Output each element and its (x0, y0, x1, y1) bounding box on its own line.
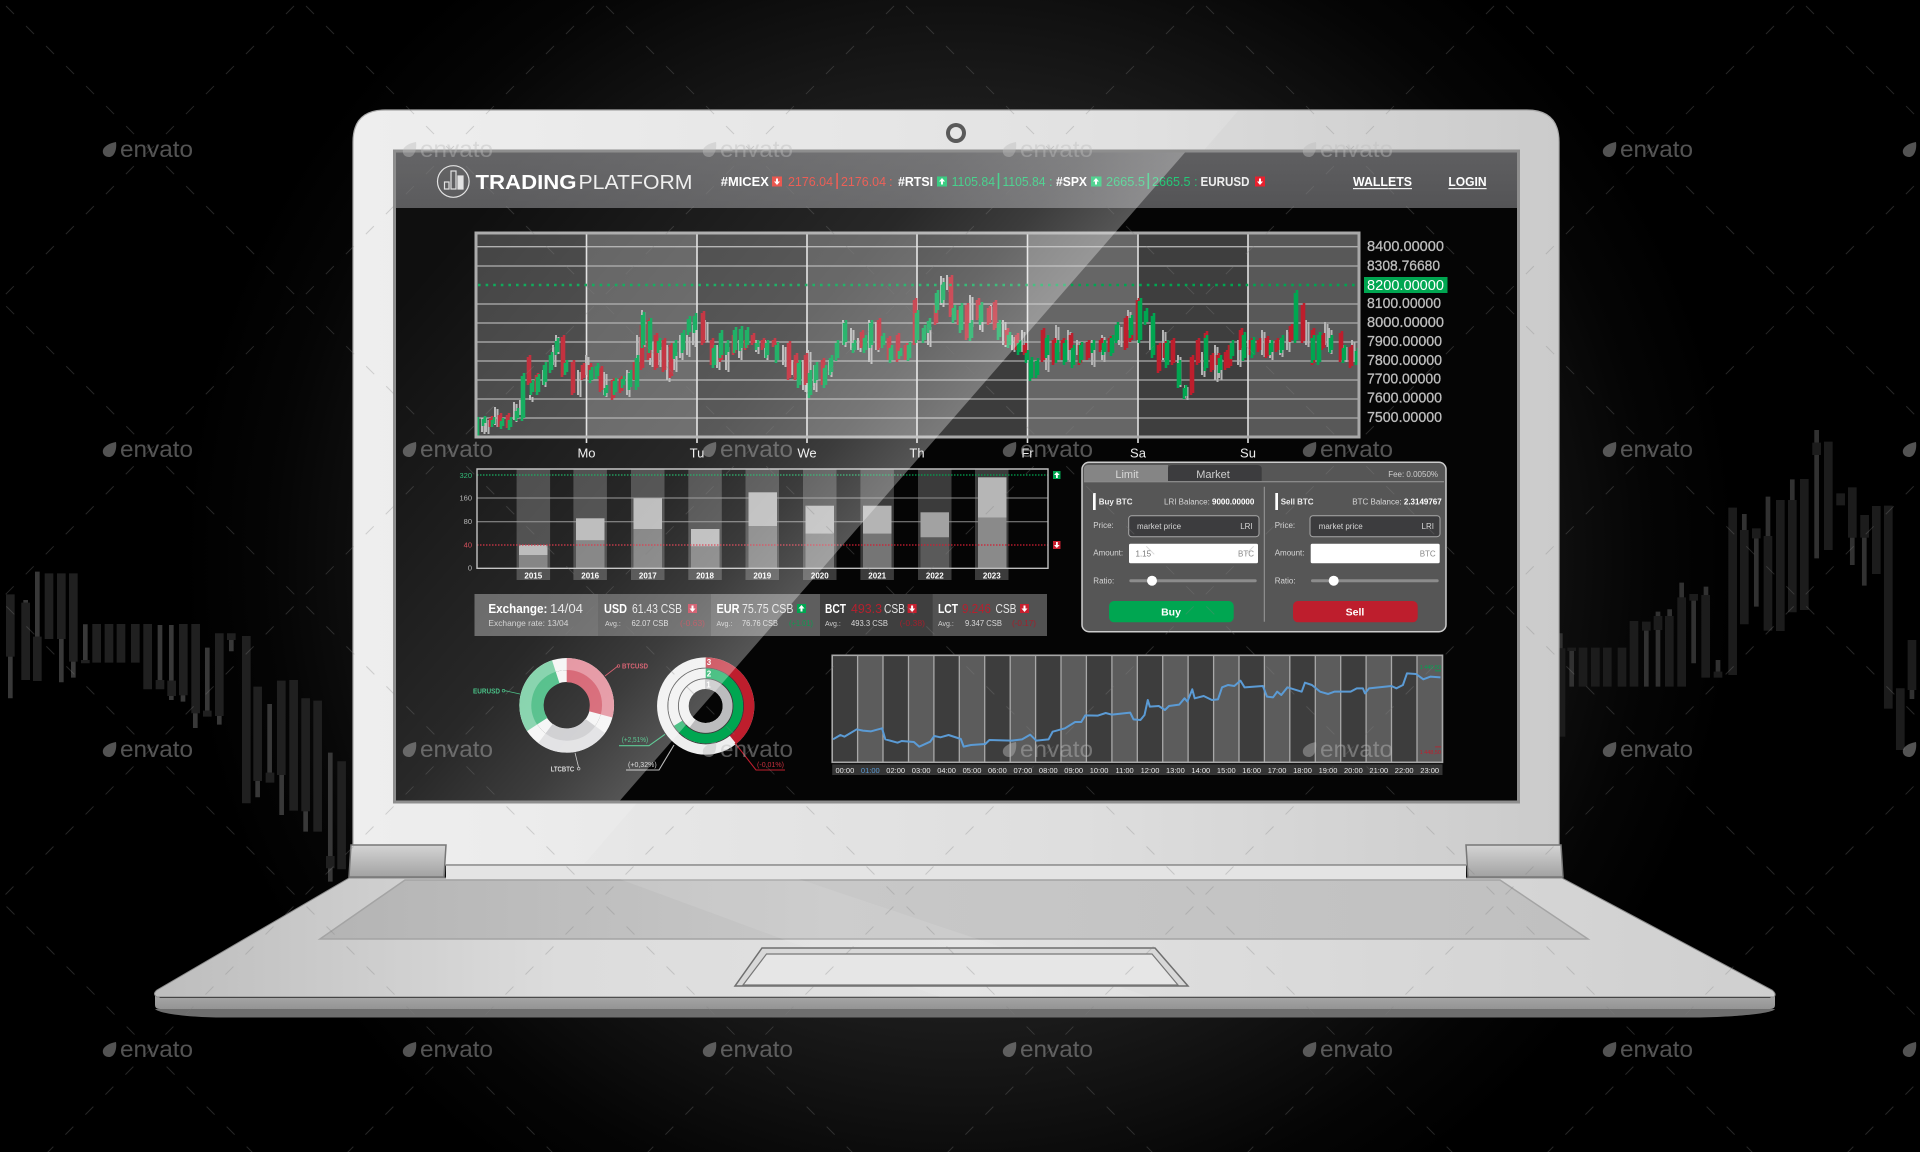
BCT: BCT (825, 601, 846, 616)
time axis: 04:00 (937, 766, 956, 775)
time axis: 19:00 (1319, 766, 1337, 775)
envato watermarks: envato (1020, 1036, 1093, 1062)
panel body (1082, 462, 1446, 632)
bar axis labels: 320 (459, 471, 472, 480)
buy form: Buy BTC (1099, 498, 1133, 506)
envato watermarks: envato (720, 436, 793, 462)
BCT: 493.3 (851, 601, 882, 616)
envato watermarks (103, 136, 1920, 1062)
year labels: 2018 (696, 572, 714, 580)
buy form: LRI (1240, 522, 1253, 531)
tab: market (1168, 465, 1262, 481)
day labels: Su (1240, 446, 1256, 460)
price axis: 7500.00000 (1367, 410, 1442, 426)
buy form: LRI Balance: 9000.00000 (1164, 498, 1255, 506)
trade panel (1082, 462, 1446, 632)
laptop lid (353, 110, 1559, 879)
ticker: #RTSI (898, 174, 933, 189)
LCT: Avg.: (938, 621, 954, 628)
hinge left (349, 845, 446, 877)
time axis: 07:00 (1014, 766, 1032, 775)
buy form: market price (1137, 522, 1182, 531)
ticker: #MICEX (721, 174, 769, 189)
keyboard well (320, 880, 1588, 939)
envato watermarks: envato (120, 736, 193, 762)
ticker: 2176.04 (788, 174, 833, 189)
envato watermarks: envato (1620, 1036, 1693, 1062)
envato watermarks: envato (1320, 436, 1393, 462)
webcam (946, 123, 966, 143)
envato watermarks: envato (1620, 436, 1693, 462)
year labels: 2015 (524, 572, 543, 580)
red candles (490, 275, 1352, 428)
buy form: 1.15 (1136, 550, 1152, 558)
exchange strip (474, 594, 1047, 636)
exchange date: Exchange: (488, 601, 547, 616)
LCT: 9.246 (962, 601, 991, 616)
envato watermarks: envato (420, 436, 493, 462)
year labels (524, 572, 1001, 580)
ring numbers: 2 (707, 670, 712, 678)
lower bars (519, 518, 1006, 568)
exchange date: 14/04 (550, 601, 583, 616)
time axis: 03:00 (912, 766, 931, 775)
low value: 1 448,50 (1420, 750, 1441, 756)
fee: Fee: 0.0050% (1388, 470, 1438, 479)
time axis: 12:00 (1141, 766, 1159, 775)
ring 3 (662, 663, 749, 749)
cell backgrounds (474, 594, 1047, 636)
year labels: 2017 (639, 572, 657, 580)
price axis: 7600.00000 (1367, 390, 1442, 406)
bar axis labels: 40 (464, 540, 472, 550)
callout +2,51: (+2,51%) (622, 735, 649, 744)
ticker: 2665.5 (1152, 174, 1190, 189)
sell form: Price: (1275, 521, 1295, 530)
sell form: BTC (1420, 550, 1436, 558)
chart frame (476, 233, 1359, 437)
envato watermarks: envato (720, 1036, 793, 1062)
main candlestick chart (476, 233, 1448, 460)
EUR (716, 601, 813, 628)
callout -0,01: (-0,01%) (757, 760, 784, 769)
price axis: 8100.00000 (1367, 296, 1441, 312)
ticker: 1105.84 (952, 174, 995, 189)
label BTCUSD: BTCUSD (622, 662, 648, 670)
threshold lines (477, 474, 1050, 476)
bar chart (459, 469, 1060, 580)
price axis: 8400.00000 (1367, 239, 1444, 255)
ticker: 2665.5 (1106, 174, 1145, 189)
buy form: Price: (1093, 521, 1114, 530)
price axis: 8308.76680 (1367, 258, 1440, 274)
tab: limit (1084, 465, 1168, 481)
LCT (938, 601, 1036, 628)
time axis: 17:00 (1268, 766, 1286, 775)
time axis: 13:00 (1166, 766, 1185, 775)
time axis: 02:00 (886, 766, 905, 775)
lid body (353, 110, 1559, 865)
sell button: Sell (1346, 606, 1364, 618)
price axis (1367, 239, 1444, 426)
vertical grid (586, 233, 1248, 443)
time axis: 15:00 (1217, 766, 1236, 775)
ticker: : (1194, 174, 1198, 189)
time axis: 23:00 (1420, 766, 1439, 775)
donut chart: pairs (473, 648, 648, 773)
year labels: 2023 (983, 572, 1001, 580)
LCT: CSB (996, 601, 1016, 616)
callout +0,32 (626, 745, 674, 770)
time axis: 08:00 (1039, 766, 1058, 775)
ticker: EURUSD (1200, 174, 1250, 189)
EUR: EUR (716, 601, 740, 616)
label BTCUSD (605, 662, 648, 676)
envato watermarks: envato (1320, 1036, 1393, 1062)
background candlesticks right (1560, 430, 1912, 750)
screen frame (394, 151, 1518, 802)
ring white (526, 664, 608, 746)
day labels: Th (909, 446, 925, 460)
USD (604, 601, 705, 628)
hinge line (446, 864, 1466, 866)
background candlesticks left (10, 572, 342, 882)
time axis: 09:00 (1064, 766, 1083, 775)
buy button: Buy (1161, 606, 1181, 618)
envato watermarks: envato (1320, 736, 1393, 762)
year labels: 2021 (868, 572, 887, 580)
bar chart frame (477, 469, 1048, 568)
nav: wallets: WALLETS (1353, 175, 1412, 189)
day labels: We (797, 446, 817, 460)
year labels: 2022 (926, 572, 944, 580)
ring numbers: 3 (707, 658, 712, 667)
hourly line chart (832, 655, 1442, 775)
price axis: 8000.00000 (1367, 315, 1444, 331)
day labels: Tu (690, 446, 704, 460)
blue price line (833, 673, 1440, 747)
EUR: Avg.: (716, 621, 732, 628)
grey candles (482, 275, 1354, 434)
EUR: 75.75 CSB (742, 601, 794, 616)
envato watermarks: envato (420, 736, 493, 762)
envato watermarks: envato (720, 736, 793, 762)
reflection on base (584, 866, 1150, 997)
LCT: (-0.17) (1012, 618, 1036, 628)
envato watermarks: envato (1620, 136, 1693, 162)
highlighted price: 8200.00000 (1367, 278, 1444, 294)
callout +0,32: (+0,32%) (628, 760, 657, 769)
logo wordmark: PLATFORM (578, 172, 692, 194)
bar axis labels: 0 (468, 564, 472, 572)
time axis: 06:00 (988, 766, 1007, 775)
time axis: 11:00 (1115, 766, 1134, 775)
logo wordmark: TRADING (476, 172, 576, 194)
laptop base (154, 866, 1775, 1018)
screen (394, 151, 1518, 802)
buy form: BTC (1238, 550, 1254, 558)
USD: 61.43 CSB (632, 601, 682, 616)
ticker: #SPX (1056, 174, 1087, 189)
time axis: 01:00 (861, 766, 880, 775)
label LTCBTC: LTCBTC (551, 764, 575, 773)
envato watermarks: envato (1020, 436, 1093, 462)
hinge right (1466, 845, 1563, 877)
envato watermarks: envato (120, 136, 193, 162)
callout +2,51 (619, 734, 665, 746)
sell form: Ratio: (1275, 577, 1296, 586)
time axis: 22:00 (1395, 766, 1414, 775)
USD: (-0.63) (680, 618, 705, 628)
horizontal grid (476, 247, 1359, 418)
segment LTCBTC (509, 648, 624, 763)
envato watermarks: envato (1320, 136, 1393, 162)
time axis: 21:00 (1369, 766, 1388, 775)
segment BTCUSD (526, 664, 608, 746)
bar axis labels: 160 (459, 494, 472, 502)
sell form: LRI (1422, 522, 1434, 531)
exchange date: Exchange rate: 13/04 (488, 618, 569, 628)
ticker: : (1049, 174, 1053, 189)
buy button (1109, 601, 1234, 622)
BCT: 493.3 CSB (851, 618, 888, 628)
time axis (832, 764, 1442, 775)
donut chart: rings (619, 658, 785, 770)
ring separators (668, 668, 744, 744)
segment EURUSD (510, 648, 624, 762)
upper bars (519, 477, 1006, 555)
label EURUSD (473, 686, 520, 695)
envato watermarks: envato (1620, 736, 1693, 762)
LCT: LCT (938, 601, 958, 616)
year labels: 2016 (581, 572, 600, 580)
logo icon (438, 166, 469, 197)
label EURUSD: EURUSD (473, 686, 500, 695)
bar axis labels (459, 471, 472, 572)
price axis: 7800.00000 (1367, 353, 1442, 369)
year labels: 2020 (811, 572, 829, 580)
ticker: : (889, 174, 893, 189)
red marker (1053, 541, 1060, 549)
time axis: 00:00 (836, 766, 854, 775)
lid gloss (354, 111, 1238, 864)
base front edge (155, 995, 1775, 1009)
sell button (1293, 601, 1418, 622)
envato watermarks: envato (120, 436, 193, 462)
label LTCBTC (551, 753, 580, 773)
day labels (577, 446, 1256, 460)
tab: limit: Limit (1115, 469, 1139, 481)
green marker (1053, 471, 1060, 479)
time axis: 14:00 (1191, 766, 1210, 775)
ticker (721, 173, 1265, 189)
envato watermarks: envato (720, 136, 793, 162)
ticker: 1105.84 (1002, 174, 1046, 189)
price axis: 7900.00000 (1367, 334, 1442, 350)
high value: 1 449,50 (1420, 665, 1441, 671)
USD: Avg.: (605, 621, 621, 628)
exchange date (488, 601, 583, 628)
day labels: Fr (1021, 446, 1034, 460)
target price dotted line (478, 284, 1357, 286)
day labels: Sa (1130, 446, 1147, 460)
ticker: 2176.04 (841, 174, 886, 189)
BCT: CSB (884, 601, 905, 616)
envato watermarks: envato (420, 136, 493, 162)
time axis: 05:00 (963, 766, 981, 775)
BCT: Avg.: (825, 621, 841, 628)
low value (1420, 746, 1441, 756)
time axis: 16:00 (1242, 766, 1261, 775)
gridlines (477, 498, 1048, 522)
day labels: Mo (577, 446, 596, 460)
time axis: 20:00 (1344, 766, 1363, 775)
envato watermarks: envato (1020, 136, 1093, 162)
bar columns (517, 469, 1008, 580)
USD: USD (604, 601, 627, 616)
sell form: Sell BTC (1281, 498, 1314, 506)
EUR: (+1.01) (789, 618, 813, 628)
LCT: 9.347 CSB (965, 618, 1002, 628)
bar axis labels: 80 (464, 517, 472, 526)
screen gloss (396, 152, 1185, 800)
ring numbers: 1 (706, 680, 711, 690)
envato watermarks: envato (120, 1036, 193, 1062)
envato watermarks: envato (1020, 736, 1093, 762)
sell form (1275, 493, 1442, 586)
tab: market: Market (1196, 469, 1230, 481)
logo wordmark (476, 172, 692, 194)
buy form: Ratio: (1093, 577, 1114, 586)
hinge strip (446, 865, 1466, 879)
time axis: 18:00 (1293, 766, 1312, 775)
green candles (476, 282, 1358, 440)
year labels: 2019 (753, 572, 772, 580)
USD: 62.07 CSB (632, 618, 669, 628)
buy form (1093, 493, 1259, 586)
ring numbers (706, 658, 712, 690)
trackpad (735, 948, 1188, 986)
chart columns (476, 233, 1359, 437)
price axis: 7700.00000 (1367, 372, 1441, 388)
BCT: (-0.38) (900, 618, 925, 628)
base underside shadow (155, 1009, 1775, 1018)
EUR: 76.76 CSB (742, 618, 778, 628)
header bar (396, 152, 1517, 208)
envato watermarks: envato (420, 1036, 493, 1062)
ring 2 (673, 674, 738, 738)
nav: login: LOGIN (1448, 175, 1487, 189)
BCT (825, 601, 925, 628)
base top surface (154, 878, 1775, 997)
callout -0,01 (735, 743, 785, 770)
hour columns (832, 655, 1442, 762)
ring 1 (684, 684, 728, 728)
sell form: market price (1319, 522, 1363, 531)
sell form: BTC Balance: 2.3149767 (1352, 498, 1442, 506)
buy form: Amount: (1093, 549, 1123, 558)
sell form: Amount: (1275, 549, 1304, 558)
time axis: 10:00 (1090, 766, 1108, 775)
